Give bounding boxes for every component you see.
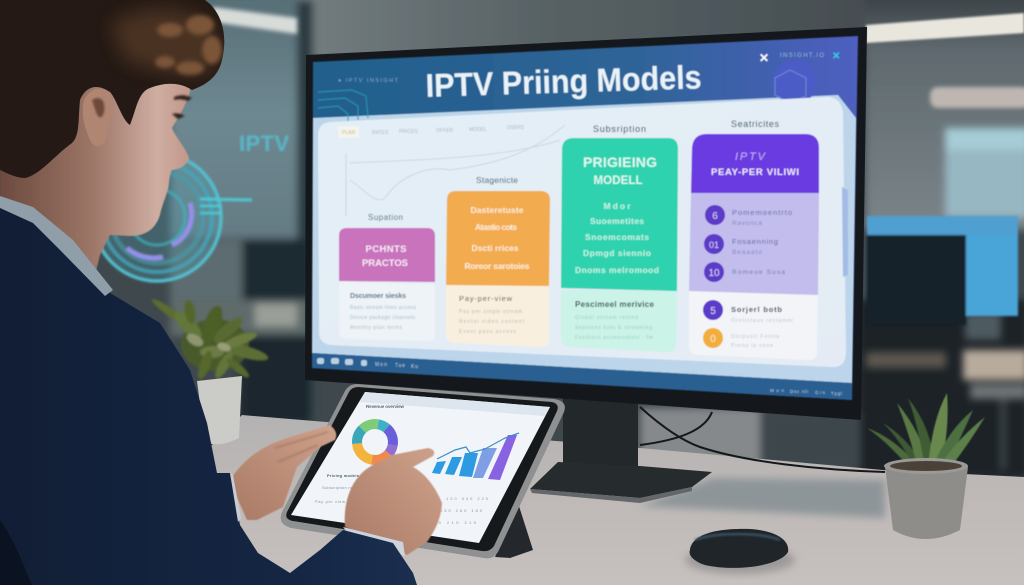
badge text: Pomemoentrto [732, 208, 792, 217]
plant on the right [867, 393, 985, 539]
card: purple [689, 119, 819, 360]
background IPTV sign: IPTV [239, 131, 289, 156]
badge text: Ravonca [732, 220, 762, 227]
header text: PRIGIEING [583, 154, 657, 170]
chair edge [0, 520, 32, 585]
background monitor on the right [867, 216, 1018, 325]
badge text: Sorjerl botb [731, 305, 782, 314]
neck and face [0, 60, 190, 275]
label: Subscription: Subsription [593, 124, 646, 134]
hologram rings [93, 153, 252, 281]
table text: 90 210 310 [434, 520, 477, 525]
card: pink: Device package channels [350, 315, 416, 321]
table text: Pay per view [315, 499, 345, 504]
panel tabs: PLAN [342, 130, 355, 136]
numbered badges: 10 [708, 268, 720, 279]
ear [83, 89, 112, 146]
table text: Pricing models [327, 473, 360, 478]
label: Stagenicte: Stagenicte [476, 175, 518, 185]
decorative hex icon [773, 60, 817, 104]
taskbar icons: Tue [395, 363, 405, 369]
label: Seatricites: Seatricites [731, 119, 780, 129]
table text: Subscription rate [322, 485, 357, 490]
panel tabs [338, 125, 525, 138]
header accent icon: ✕ [832, 51, 840, 62]
header text: IPTV [735, 151, 767, 163]
card: pink [339, 213, 435, 341]
card: orange: Event pass access [459, 329, 516, 335]
table text [315, 473, 489, 525]
card: green: Mdor [604, 201, 631, 211]
card: pink: Basic stream lines access [350, 305, 416, 311]
body text: Pescimeel merivice [575, 300, 655, 309]
numbered badges [703, 205, 725, 348]
header text: Atastio cots [475, 222, 517, 232]
taskbar icons: Tpgl [831, 391, 842, 396]
inner ear shadow [92, 98, 104, 117]
numbered badges: 0 [710, 334, 716, 345]
panel tabs: PRICES [399, 129, 418, 135]
suit jacket [0, 205, 417, 585]
header tag: ● IPTV INSIGHT [338, 78, 399, 84]
badge text: Oretistaus reclamer [731, 318, 793, 324]
screen decorative circuit [318, 90, 368, 122]
card: green: Fastbarit accmessbots · fm [575, 335, 653, 341]
header text: Roreor sarotoies [464, 261, 530, 271]
eye and brow [172, 95, 192, 119]
taskbar icons: Mon [375, 362, 387, 368]
person [0, 0, 417, 585]
header text: Dscti rrices [472, 243, 519, 253]
bar chart [432, 433, 519, 480]
ceiling lights [213, 7, 1024, 108]
panel tabs: OFFER [436, 128, 453, 134]
tablet screen [291, 392, 550, 543]
label: Supation: Supation [368, 213, 403, 222]
card: green: Dpmgd siennio [583, 248, 651, 258]
table text: 120 340 220 [446, 496, 489, 501]
badge text: Beaaato [732, 249, 762, 256]
taskbar icons: Gin [815, 390, 825, 395]
right plant pot [885, 467, 968, 539]
plant pot [197, 376, 242, 444]
card: orange [446, 175, 550, 347]
card: green: Sepvices bots & streaming [575, 325, 652, 331]
card: orange: Pay per single stream [459, 309, 522, 315]
card: green: MODELL [594, 175, 642, 187]
badge text [731, 208, 793, 349]
panel tabs: MODEL [469, 127, 487, 133]
badge text: Prenu la vone [731, 343, 773, 349]
card: green: Snoemcomats [585, 232, 649, 242]
numbered badges: 01 [709, 240, 719, 250]
taskbar icons: Ku [411, 364, 418, 370]
panel tabs: RATES [372, 130, 389, 136]
taskbar icons [317, 358, 842, 396]
mouse [685, 529, 795, 574]
card: orange: Rental video content [459, 319, 525, 325]
window glow [945, 128, 1024, 218]
right hand and pointing finger [343, 448, 442, 556]
plant on the left [150, 296, 270, 444]
numbered badges: 5 [710, 306, 716, 317]
badge text: Dorpusit Fonna [731, 334, 780, 340]
card: purple: PEAY-PER VILIWI [711, 167, 799, 178]
back desk shelves [866, 312, 1024, 470]
close icon: ✕ [759, 51, 769, 65]
table text: 150 260 180 [440, 508, 483, 513]
body text: Dscumoer siesks [350, 293, 406, 300]
left hand holding tablet [232, 425, 336, 520]
header text: PCHNTS [366, 244, 406, 255]
tablet [281, 384, 565, 558]
monitor frame [305, 27, 867, 420]
card: green: Suoemetites [590, 216, 644, 226]
card: green [561, 124, 678, 352]
main panel [318, 97, 846, 367]
faint background line chart [346, 125, 565, 216]
panel side tab [842, 187, 848, 277]
card: pink: Monthly plan terms [350, 325, 402, 331]
hair [0, 0, 235, 185]
monitor stand [530, 396, 712, 503]
lower light screen area [312, 95, 856, 383]
badge text: Fosaenning [732, 237, 778, 246]
donut chart [357, 424, 393, 460]
desk reflection [640, 478, 885, 518]
taskbar icons: Dsc Ali [790, 389, 808, 394]
card: green: Global stream rented [575, 315, 638, 321]
header small text: INSIGHT.IO [780, 53, 824, 59]
shirt cuff [230, 473, 241, 522]
taskbar icons: Mon [770, 388, 784, 393]
numbered badges: 6 [712, 211, 718, 222]
desk surface [205, 415, 1024, 585]
tablet stand [495, 503, 533, 558]
tablet header text: Revenue overview [366, 404, 404, 409]
monitor screen [312, 36, 858, 400]
header text: Dasteretuste [470, 205, 524, 215]
title: IPTV Priing Models [425, 58, 702, 104]
panel tabs: USERS [507, 125, 525, 131]
badge text: Romeue Susa [732, 269, 785, 276]
card: pink: PRACTOS [362, 258, 408, 269]
body text: Pay-per-view [459, 294, 513, 303]
shirt collar [0, 196, 113, 296]
monitor cables [640, 407, 885, 472]
header text [464, 205, 530, 271]
bottom screen strip [312, 353, 852, 400]
card: green: Dnoms melromood [575, 265, 659, 275]
